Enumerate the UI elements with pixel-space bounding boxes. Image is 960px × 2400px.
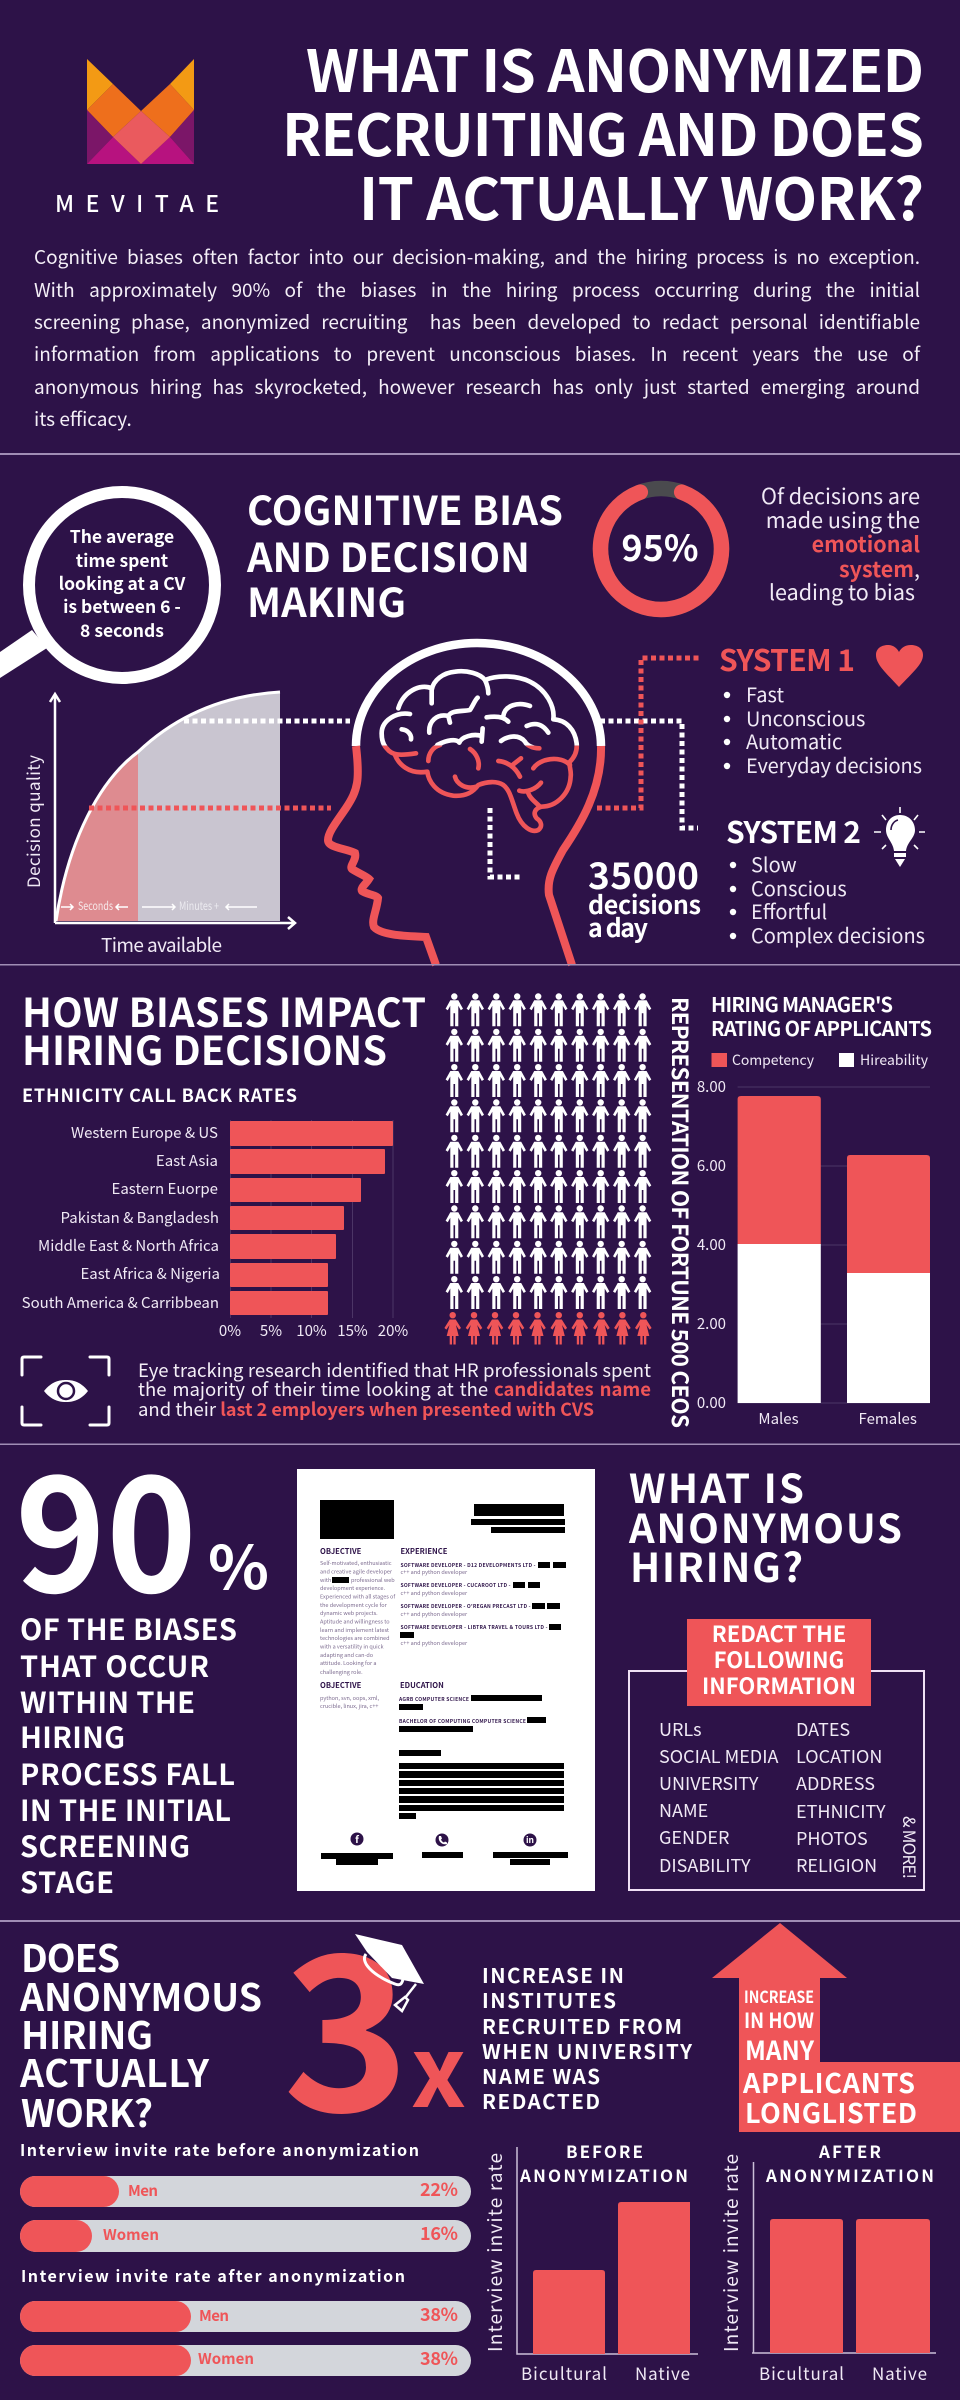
heading: does anonymous hiring work: ACTUALLY — [19, 2043, 210, 2098]
text: decisions emotional — [761, 480, 920, 607]
main title: IT ACTUALLY WORK? — [359, 153, 924, 237]
arrow: applicants longlisted: LONGLISTED — [745, 2092, 917, 2131]
donut: 95%: 95% — [621, 520, 699, 572]
redacted CV: BACHELOR OF COMPUTING COMPUTER SCIENCE — [399, 1718, 526, 1725]
system 1: Unconscious — [746, 703, 865, 732]
redacted CV: challenging role. — [320, 1668, 363, 1676]
stacked bar chart: hiring manager rating: 4.00 — [697, 1234, 726, 1255]
stat: 3x — [283, 1862, 466, 2173]
stat: 35000 decisions: decisions — [588, 886, 701, 922]
bars: invite rate after — [20, 2263, 471, 2376]
arrow: applicants longlisted: INCREASE — [744, 1983, 814, 2008]
bar chart: ethnicity call back rates — [22, 1082, 408, 1341]
redacted CV: c++ and python developer — [400, 1589, 468, 1597]
icon: light bulb — [874, 807, 925, 867]
bars: invite rate before — [20, 2137, 471, 2252]
magnifier callout: 8 seconds — [80, 618, 164, 643]
graph: decision quality: Seconds — [78, 898, 113, 914]
arrow: applicants longlisted: IN HOW — [744, 2005, 814, 2035]
redacted CV: attitude. Looking for a — [320, 1659, 377, 1667]
bars: invite rate after: 38% — [420, 2345, 458, 2371]
stacked bar chart: hiring manager rating: Males — [758, 1408, 799, 1429]
panel: redact list: LOCATION — [796, 1743, 882, 1769]
redacted CV: python, svn, oops, xml, — [320, 1694, 379, 1702]
stacked bar chart: hiring manager rating: Competency — [732, 1050, 815, 1070]
bars: invite rate after: Women — [198, 2348, 254, 2369]
stacked bar chart: hiring manager rating: 0.00 — [697, 1392, 726, 1413]
text: decisions emotional: Of decisions are — [761, 480, 920, 511]
magnifier callout: is between 6 - — [63, 594, 181, 619]
eye tracking text: and their last 2 employers when presented with CVS — [138, 1396, 594, 1422]
section divider — [0, 453, 960, 455]
stat: 35000 decisions: a day — [588, 909, 649, 945]
chart: after anonymization: Interview invite rate — [717, 2154, 744, 2352]
text: of the biases: STAGE — [20, 1860, 114, 1902]
panel: redact list: FOLLOWING — [714, 1643, 844, 1675]
redacted CV: SOFTWARE DEVELOPER - CUCAROOT LTD - — [400, 1582, 511, 1589]
redacted CV: c++ and python developer — [400, 1610, 468, 1618]
panel: redact list: INFORMATION — [702, 1669, 856, 1701]
section divider — [0, 1444, 960, 1445]
intro paragraph: its efficacy. — [34, 405, 132, 432]
stacked bar chart: hiring manager rating: HIRING MANAGER'S — [711, 989, 893, 1018]
bars: invite rate after: Men — [199, 2305, 229, 2326]
redacted CV: technologies are combined — [320, 1634, 390, 1642]
heading: what is anonymous hiring: WHAT IS — [629, 1457, 804, 1515]
bar chart: ethnicity call back rates: Western Europe & US — [71, 1122, 218, 1143]
stat: 3x: 3 — [283, 1862, 410, 2173]
chart: before anonymization: Bicultural — [521, 2360, 607, 2385]
heading: does anonymous hiring work: HIRING — [21, 2005, 153, 2060]
text: increase in institutes: NAME WAS — [482, 2060, 600, 2090]
bar chart: ethnicity call back rates: ETHNICITY CALL BACK RATES — [22, 1082, 297, 1108]
heading: cognitive bias: MAKING — [247, 571, 406, 629]
redacted CV: with a versatility in quick — [320, 1642, 384, 1650]
text: decisions emotional: leading to bias — [769, 576, 915, 607]
magnifier callout — [0, 492, 215, 678]
bar chart: ethnicity call back rates: 0% — [219, 1320, 241, 1341]
arrow: applicants longlisted: MANY — [745, 2031, 815, 2068]
heading: cognitive bias — [246, 479, 563, 629]
stacked bar chart: hiring manager rating: 2.00 — [697, 1313, 726, 1334]
bar chart: ethnicity call back rates: East Africa & Nigeria — [80, 1263, 220, 1284]
stacked bar chart: hiring manager rating: Hireability — [860, 1050, 929, 1070]
text: increase in institutes: REDACTED — [482, 2085, 600, 2115]
bars: invite rate before: Interview invite rate before anonymization — [20, 2137, 419, 2161]
intro paragraph: Cognitive biases often factor into our decision-making, and the hiring process is no exception. — [34, 243, 920, 270]
redacted CV: Self-motivated, enthusiastic — [320, 1559, 392, 1567]
system 1 — [719, 636, 923, 779]
stat: 90%: % — [208, 1520, 269, 1607]
arrow: applicants longlisted — [712, 1923, 960, 2132]
redacted CV: development experience. — [320, 1584, 385, 1592]
chart: before anonymization: Interview invite rate — [481, 2153, 508, 2352]
graph: decision quality: Time available — [101, 931, 222, 958]
stat: 35000 decisions: 35000 — [588, 846, 699, 900]
donut: 95% — [600, 488, 722, 610]
intro paragraph — [34, 243, 921, 432]
stacked bar chart: hiring manager rating: RATING OF APPLICANTS — [711, 1013, 932, 1042]
stat: 90%: 90 — [15, 1407, 197, 1639]
panel: redact list: UNIVERSITY — [659, 1770, 759, 1796]
main title: RECRUITING AND DOES — [282, 89, 924, 173]
text: increase in institutes: WHEN UNIVERSITY — [482, 2035, 693, 2065]
redacted CV: the development cycle for — [320, 1601, 388, 1609]
heading: what is anonymous hiring — [628, 1457, 902, 1594]
panel: redact list: REDACT THE — [712, 1617, 846, 1649]
redacted CV: EXPERIENCE — [400, 1546, 448, 1557]
bar chart: ethnicity call back rates: 5% — [260, 1320, 282, 1341]
redacted CV: crucible, linux, jira, c++ — [320, 1702, 378, 1710]
system 2: Slow — [751, 849, 797, 878]
bar chart: ethnicity call back rates: 15% — [337, 1320, 368, 1341]
heading: how biases impact: HIRING DECISIONS — [22, 1020, 387, 1077]
icon: eye tracking — [22, 1357, 109, 1425]
logo: Mevitae — [55, 59, 219, 219]
redacted CV: and creative agile developer — [320, 1568, 393, 1576]
heading: does anonymous hiring work — [19, 1928, 262, 2138]
heading: does anonymous hiring work: ANONYMOUS — [19, 1967, 262, 2022]
redacted CV: adapting and can-do — [320, 1651, 374, 1659]
text: increase in institutes — [482, 1959, 693, 2115]
head and brain — [328, 643, 601, 965]
text: of the biases: OF THE BIASES — [20, 1607, 237, 1649]
heading: what is anonymous hiring: HIRING? — [630, 1536, 803, 1594]
redacted CV: SOFTWARE DEVELOPER - O'REGAN PRECAST LTD - — [400, 1603, 531, 1610]
logo: Mevitae: MEVITAE — [55, 185, 219, 219]
magnifier callout: looking at a CV — [59, 571, 186, 596]
bar chart: ethnicity call back rates: Middle East & North Africa — [38, 1235, 219, 1256]
panel: redact list: ETHNICITY — [796, 1798, 886, 1824]
stat: 3x: x — [411, 1994, 466, 2136]
text: of the biases: THAT OCCUR — [20, 1644, 209, 1686]
bar chart: ethnicity call back rates: 10% — [296, 1320, 327, 1341]
dotted connectors — [89, 658, 700, 877]
graph: decision quality: Decision quality — [20, 755, 45, 888]
chart: after anonymization: Native — [872, 2360, 927, 2385]
bar chart: ethnicity call back rates: Eastern Euorpe — [111, 1178, 218, 1199]
panel: redact list: NAME — [659, 1797, 708, 1823]
heading: how biases impact: HOW BIASES IMPACT — [22, 982, 426, 1039]
chart: before anonymization: Native — [635, 2360, 690, 2385]
graph: decision quality: Minutes + — [179, 898, 219, 914]
panel: redact list: ADDRESS — [796, 1770, 875, 1796]
text: increase in institutes: INSTITUTES — [482, 1984, 616, 2014]
bar chart: ethnicity call back rates: 20% — [378, 1320, 408, 1341]
redacted CV: Experienced with all stages of — [320, 1592, 395, 1600]
section divider — [0, 964, 960, 966]
panel: redact list: DISABILITY — [659, 1852, 751, 1878]
system 2: Complex decisions — [751, 920, 925, 949]
chart: after anonymization — [717, 2138, 936, 2385]
bar chart: ethnicity call back rates: Pakistan & Bangladesh — [61, 1207, 219, 1228]
redacted CV: professional web — [351, 1576, 395, 1584]
text: of the biases: PROCESS FALL — [20, 1752, 235, 1794]
bar chart: ethnicity call back rates: East Asia — [156, 1150, 218, 1171]
redacted CV: f — [355, 1831, 360, 1846]
bars: invite rate after: Interview invite rate after anonymization — [21, 2263, 405, 2287]
bar chart: ethnicity call back rates: South America & Carribbean — [22, 1292, 219, 1313]
redacted CV: AGRB COMPUTER SCIENCE — [398, 1696, 469, 1703]
redacted CV: OBJECTIVE — [320, 1546, 362, 1557]
intro paragraph: With approximately 90% of the biases in the hiring process occurring during the initial — [34, 276, 920, 303]
eye tracking text: Eye tracking research identified that HR professionals spent — [138, 1357, 651, 1383]
panel: redact list: PHOTOS — [796, 1825, 868, 1851]
stat: 35000 decisions — [588, 846, 701, 945]
main title — [282, 25, 924, 237]
redacted CV: EDUCATION — [400, 1680, 444, 1691]
stacked bar chart: hiring manager rating: Females — [859, 1408, 917, 1429]
redacted CV: dynamic web projects. — [320, 1609, 378, 1617]
people grid: fortune 500 CEOs — [444, 993, 652, 1344]
redacted CV: SOFTWARE DEVELOPER - LIBTRA TRAVEL & TOURS LTD - — [400, 1624, 548, 1631]
text: of the biases: SCREENING — [20, 1824, 190, 1866]
redacted CV: SOFTWARE DEVELOPER - D12 DEVELOPMENTS LTD - — [400, 1562, 536, 1569]
redacted CV: c++ and python developer — [400, 1639, 468, 1647]
intro paragraph: information from applications to prevent unconscious biases. In recent years the use of — [34, 340, 920, 367]
heading: cognitive bias: AND DECISION — [246, 526, 530, 584]
arrow: applicants longlisted: APPLICANTS — [742, 2062, 915, 2101]
bars: invite rate before: Men — [128, 2180, 158, 2201]
system 1: Everyday decisions — [746, 750, 922, 779]
bars: invite rate before: 16% — [420, 2220, 458, 2246]
panel: redact list — [629, 1617, 924, 1890]
panel: redact list: RELIGION — [796, 1852, 877, 1878]
redacted CV: c++ and python developer — [400, 1568, 468, 1576]
redacted CV: with — [320, 1576, 331, 1584]
text: decisions emotional: made using the — [766, 504, 920, 535]
bars: invite rate after: 38% — [420, 2301, 458, 2327]
system 2: SYSTEM 2 — [726, 808, 861, 852]
redacted CV: Aptitude and willingness to — [320, 1618, 390, 1626]
heading: cognitive bias: COGNITIVE BIAS — [247, 479, 563, 537]
heading: how biases impact — [22, 982, 426, 1077]
system 2: Effortful — [751, 896, 827, 925]
icon: graduation cap — [355, 1934, 424, 2011]
system 1: Automatic — [746, 726, 842, 755]
redacted CV — [297, 1469, 595, 1891]
redacted CV: OBJECTIVE — [320, 1680, 362, 1691]
text: decisions emotional: system, — [839, 553, 920, 584]
panel: redact list: & MORE! — [898, 1816, 923, 1879]
panel: redact list: DATES — [796, 1716, 850, 1742]
redacted CV: in — [526, 1834, 534, 1846]
intro paragraph: screening phase, anonymized recruiting has been developed to redact personal identifiable — [34, 308, 920, 335]
eye tracking text: the majority of their time looking at the candidates name — [138, 1376, 651, 1402]
chart: before anonymization: BEFORE — [566, 2138, 643, 2163]
text: of the biases: IN THE INITIAL — [20, 1788, 231, 1830]
eye tracking text — [138, 1357, 651, 1422]
section divider — [0, 1920, 960, 1922]
chart: after anonymization: ANONYMIZATION — [765, 2162, 934, 2187]
heading: does anonymous hiring work: DOES — [21, 1928, 120, 1983]
system 2: Conscious — [751, 873, 847, 902]
chart: after anonymization: AFTER — [818, 2138, 881, 2163]
panel: redact list: URLs — [659, 1716, 702, 1742]
rotated label: representation: REPRESENTATION OF FORTUNE 500 CEOS — [665, 997, 697, 1428]
stacked bar chart: hiring manager rating — [697, 989, 932, 1429]
redacted CV: learn and implement latest — [320, 1626, 389, 1634]
heading: does anonymous hiring work: WORK? — [21, 2083, 153, 2138]
text: decisions emotional: emotional — [812, 528, 920, 559]
text: of the biases: HIRING — [20, 1715, 125, 1757]
bars: invite rate before: Women — [103, 2224, 159, 2245]
main title: WHAT IS ANONYMIZED — [306, 25, 924, 109]
chart: before anonymization — [481, 2138, 698, 2385]
system 1: Fast — [746, 679, 784, 708]
bars: invite rate before: 22% — [420, 2176, 458, 2202]
text: increase in institutes: INCREASE IN — [482, 1959, 624, 1989]
text: of the biases: WITHIN THE — [20, 1680, 195, 1722]
heading: what is anonymous hiring: ANONYMOUS — [628, 1497, 902, 1555]
magnifier callout: The average — [70, 524, 174, 549]
magnifier callout: time spent — [76, 548, 169, 573]
text: increase in institutes: RECRUITED FROM — [482, 2010, 682, 2040]
stacked bar chart: hiring manager rating: 8.00 — [697, 1076, 726, 1097]
system 2 — [726, 808, 925, 949]
chart: before anonymization: ANONYMIZATION — [519, 2162, 688, 2187]
graph: decision quality — [20, 692, 295, 958]
intro paragraph: anonymous hiring has skyrocketed, however research has only just started emerging around — [34, 373, 920, 400]
system 1: SYSTEM 1 — [719, 636, 855, 680]
panel: redact list: GENDER — [659, 1824, 729, 1850]
stacked bar chart: hiring manager rating: 6.00 — [697, 1155, 726, 1176]
panel: redact list: SOCIAL MEDIA — [659, 1743, 778, 1769]
text: of the biases — [20, 1607, 237, 1902]
chart: after anonymization: Bicultural — [759, 2360, 844, 2385]
